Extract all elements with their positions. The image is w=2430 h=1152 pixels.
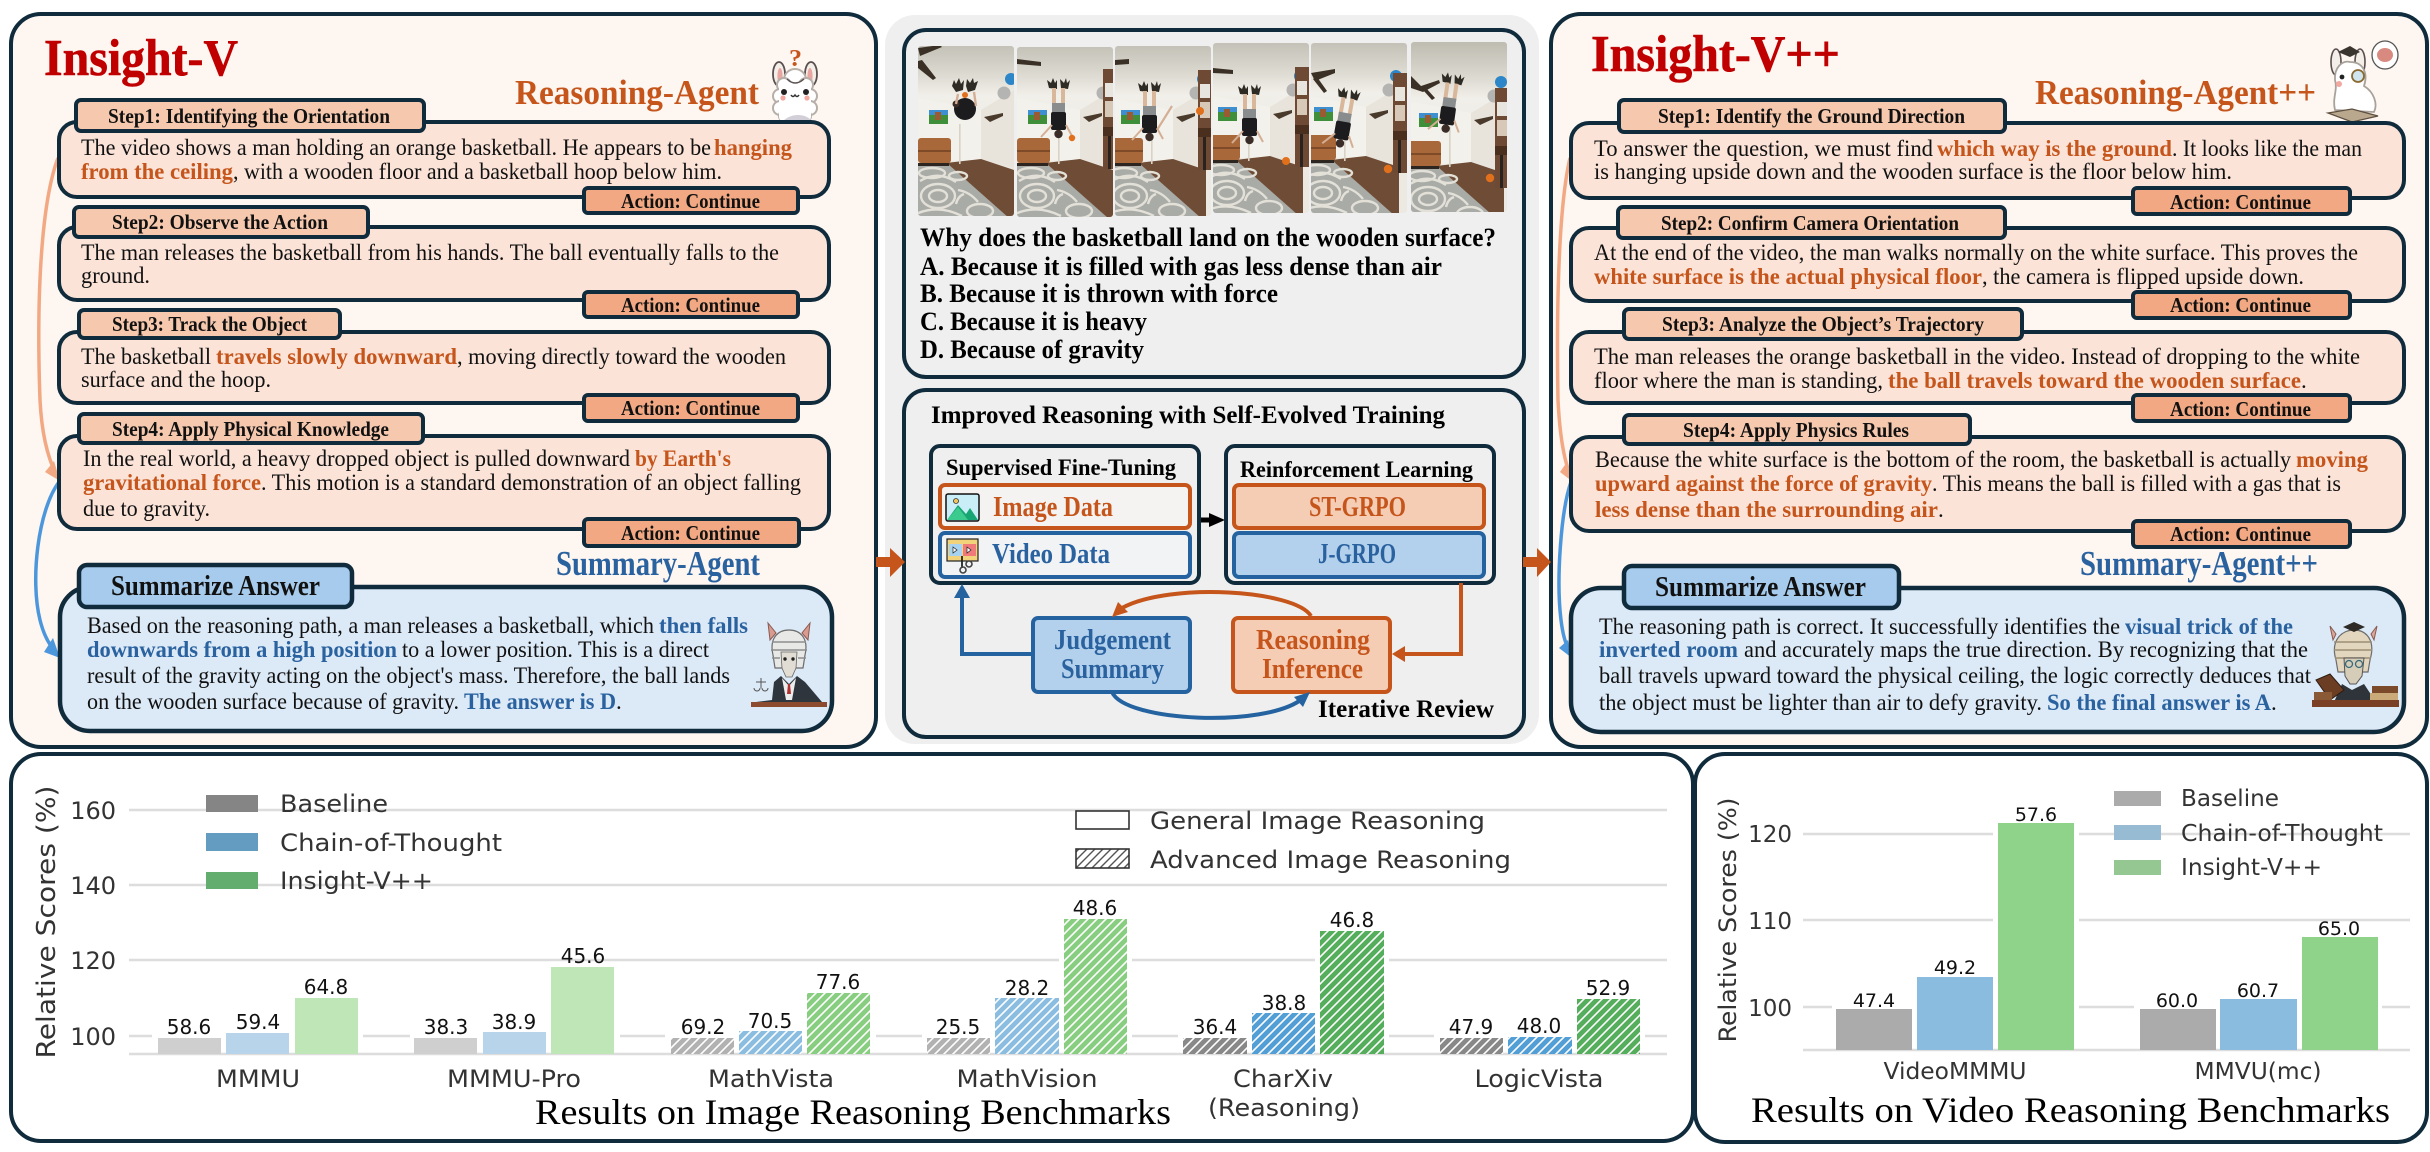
legend: methods: Insight-V++	[2181, 855, 2322, 881]
summary box: on the wooden surface because of gravity.	[87, 689, 459, 714]
bars: MathVision: 25.5	[936, 1015, 980, 1039]
label: iterative review: Iterative Review	[1318, 696, 1494, 723]
icon: judge alpaca	[751, 623, 827, 707]
arrow: left panel to center	[876, 548, 905, 577]
summary box: Based on the reasoning path, a man releases a basketball, which	[87, 613, 654, 638]
step 4: due to gravity.	[83, 496, 210, 521]
arrow: to reinforcement learning	[1201, 513, 1225, 527]
summary box: The reasoning path is correct. It successfully identifies the	[1599, 614, 2120, 639]
step 2: Step2: Confirm Camera Orientation	[1661, 211, 1959, 235]
box: reasoning inference: Reasoning	[1256, 625, 1370, 656]
step 3	[59, 310, 829, 421]
step 3: surface and the hoop.	[81, 367, 271, 392]
step 4: Step4: Apply Physical Knowledge	[112, 417, 389, 441]
arrow: reasoning flow	[1558, 158, 1573, 482]
bars: MathVision: 48.6	[1073, 896, 1117, 920]
step 2: white surface is the actual physical floor	[1594, 264, 1982, 289]
bars: MathVista: 77.6	[816, 970, 860, 994]
step 2: ground.	[81, 263, 150, 288]
panel: video reasoning benchmarks	[1695, 754, 2427, 1142]
panel: Insight-V++	[1523, 14, 2427, 747]
step 4: by Earth's	[635, 446, 731, 471]
bars: MathVista: MathVista	[708, 1065, 834, 1093]
heading: Reasoning-Agent++: Reasoning-Agent++	[2035, 73, 2316, 112]
step 4: upward against the force of gravity	[1595, 471, 1932, 496]
summary box: .	[2271, 690, 2277, 715]
step 3: , moving directly toward the wooden	[457, 344, 786, 369]
step 4: Action: Continue	[2170, 522, 2311, 546]
bars: MMMU: 64.8	[304, 975, 348, 999]
bars: CharXiv: 36.4	[1193, 1015, 1237, 1039]
heading: training: Improved Reasoning with Self-Evolved Training	[931, 402, 1445, 429]
step 4: . This motion is a standard demonstration of an object falling	[261, 470, 801, 495]
arrow: summary to inference	[1112, 692, 1310, 718]
bars: MMVU(mc): 60.7	[2237, 980, 2279, 1002]
box: judgement summary: Summary	[1061, 654, 1164, 685]
bars: MMMU-Pro: 45.6	[561, 944, 605, 968]
step 3	[1571, 309, 2404, 421]
question and options: D. Because of gravity	[920, 335, 1144, 364]
legend: methods: Chain-of-Thought	[280, 829, 502, 857]
summary box: Summarize Answer	[1655, 571, 1866, 603]
icon: thinking alpaca	[2328, 41, 2398, 122]
step 1: which way is the ground	[1937, 136, 2172, 161]
panel: supervised fine-tuning: Supervised Fine-Tuning	[946, 455, 1176, 480]
y axis: 100	[1748, 996, 1792, 1022]
summary box: Summarize Answer	[111, 570, 320, 602]
summary box: So the final answer is A	[2047, 690, 2271, 715]
panel: supervised fine-tuning: Image Data	[993, 492, 1113, 523]
box: judgement summary	[1033, 618, 1190, 692]
step 3: The man releases the orange basketball in the video. Instead of dropping to the white	[1594, 344, 2360, 369]
legend: methods	[206, 790, 502, 895]
bars: MathVista	[671, 970, 870, 1093]
summary box: The answer is D	[464, 689, 616, 714]
step 3: floor where the man is standing,	[1594, 368, 1883, 393]
y axis: 160	[70, 797, 116, 825]
y axis: Relative Scores (%)	[1714, 798, 1742, 1042]
bars: MMVU(mc): 65.0	[2318, 918, 2360, 940]
step 1: Step1: Identify the Ground Direction	[1658, 104, 1965, 128]
bars: LogicVista: LogicVista	[1474, 1065, 1604, 1093]
arrow: reinforcement to inference	[1392, 583, 1461, 662]
bars: CharXiv: 46.8	[1330, 908, 1374, 932]
panel: reinforcement learning: Reinforcement Learning	[1240, 457, 1473, 482]
panel: Insight-V	[11, 14, 876, 747]
bars: VideoMMMU: VideoMMMU	[1884, 1059, 2026, 1085]
step 1: . It looks like the man	[2172, 136, 2362, 161]
panel: self-evolved training	[904, 390, 1524, 737]
bars: MMMU-Pro: MMMU-Pro	[447, 1065, 581, 1093]
step 1: To answer the question, we must find	[1594, 136, 1933, 161]
bars: MMMU: 59.4	[236, 1010, 280, 1034]
step 3: .	[2301, 368, 2307, 393]
grid lines	[129, 810, 1667, 1054]
panel: reinforcement learning: ST-GRPO	[1309, 492, 1406, 523]
bars: VideoMMMU: 47.4	[1853, 990, 1895, 1012]
bars: MMMU-Pro: 38.3	[424, 1015, 468, 1039]
question and options	[920, 223, 1496, 364]
question and options: A. Because it is filled with gas less dense than air	[920, 252, 1442, 281]
step 2: The man releases the basketball from his hands. The ball eventually falls to the	[81, 240, 779, 265]
summary box: and accurately maps the true direction. By recognizing that the	[1744, 637, 2308, 662]
step 4	[1571, 415, 2404, 547]
step 4: Because the white surface is the bottom of the room, the basketball is actually	[1595, 447, 2291, 472]
bars: LogicVista: 52.9	[1586, 976, 1630, 1000]
bars: VideoMMMU: 57.6	[2015, 804, 2057, 826]
step 3: travels slowly downward	[216, 344, 457, 369]
step 3: Action: Continue	[621, 396, 760, 420]
panel: supervised fine-tuning	[931, 446, 1199, 583]
summary box: inverted room	[1599, 637, 1738, 662]
legend: methods	[2114, 786, 2383, 881]
step 3: Step3: Analyze the Object’s Trajectory	[1662, 312, 1984, 336]
bars: MMMU: MMMU	[216, 1065, 300, 1093]
summary box: downwards from a high position	[87, 637, 397, 662]
grid lines	[1803, 834, 2410, 1050]
bars: MMMU	[158, 975, 358, 1093]
arrow: reasoning flow	[39, 158, 60, 481]
step 1: from the ceiling	[81, 159, 233, 184]
legend: task types: Advanced Image Reasoning	[1150, 846, 1511, 874]
step 1: The video shows a man holding an orange basketball. He appears to be	[81, 135, 711, 160]
bars: MathVista: 69.2	[681, 1015, 725, 1039]
bars: LogicVista: 48.0	[1517, 1014, 1561, 1038]
step 3: the ball travels toward the wooden surface	[1888, 368, 2301, 393]
step 1: , with a wooden floor and a basketball hoop below him.	[233, 159, 722, 184]
step 4: Step4: Apply Physics Rules	[1683, 418, 1909, 442]
arrow: center to right panel	[1523, 548, 1551, 577]
summary box: .	[616, 689, 622, 714]
summary box: then falls	[659, 613, 748, 638]
video frame 6	[1411, 42, 1507, 212]
bars: MathVision: MathVision	[956, 1065, 1098, 1093]
bars: CharXiv: 38.8	[1262, 991, 1306, 1015]
legend: task types	[1076, 807, 1511, 874]
legend: methods: Chain-of-Thought	[2181, 821, 2383, 847]
box: reasoning inference: Inference	[1262, 654, 1363, 685]
step 2: Action: Continue	[2170, 293, 2311, 317]
bars: MMMU-Pro	[414, 944, 614, 1093]
y axis: 120	[70, 947, 116, 975]
y axis	[1714, 798, 1792, 1042]
y axis: Relative Scores (%)	[32, 786, 62, 1058]
legend: task types: General Image Reasoning	[1150, 807, 1485, 835]
y axis: 110	[1748, 909, 1792, 935]
summary box: result of the gravity acting on the object's mass. Therefore, the ball lands	[87, 663, 730, 688]
video frame 2	[1017, 47, 1113, 217]
bars: MathVista: 70.5	[748, 1009, 792, 1033]
question and options: B. Because it is thrown with force	[920, 279, 1278, 308]
arrow: summary flow	[36, 482, 60, 658]
step 1	[59, 100, 829, 213]
title: Insight-V: Insight-V	[44, 30, 238, 87]
step 4: gravitational force	[83, 470, 261, 495]
arrow: summary to supervised	[954, 584, 1033, 654]
summary box	[60, 565, 832, 731]
panel: reinforcement learning	[1226, 446, 1494, 583]
summary box: to a lower position. This is a direct	[402, 637, 710, 662]
bars: MathVision: 28.2	[1005, 976, 1049, 1000]
chart title: image: Results on Image Reasoning Benchmarks	[535, 1092, 1171, 1132]
step 4: Action: Continue	[621, 521, 760, 545]
step 3: Action: Continue	[2170, 397, 2311, 421]
step 2: Action: Continue	[621, 293, 760, 317]
y axis: 120	[1748, 822, 1792, 848]
icon: confused alpaca	[773, 46, 817, 122]
summary box: ball travels upward toward the physical ceiling, the logic correctly deduces that	[1599, 663, 2312, 688]
icon: scholar judge alpaca	[2312, 622, 2399, 707]
bars: VideoMMMU: 49.2	[1934, 957, 1976, 979]
title: Insight-V++: Insight-V++	[1591, 26, 1840, 83]
legend: methods: Insight-V++	[280, 867, 433, 895]
bars: MMVU(mc)	[2140, 918, 2378, 1085]
step 1	[1571, 100, 2404, 214]
step 4: .	[1938, 497, 1944, 522]
y axis: 100	[70, 1023, 116, 1051]
arrow: summary flow	[1559, 482, 1572, 658]
step 4	[59, 414, 829, 546]
bars: MathVision	[927, 896, 1127, 1093]
legend: methods: Baseline	[280, 790, 388, 818]
icon: confused alpaca: ?	[789, 46, 802, 72]
panel: image reasoning benchmarks	[11, 754, 1693, 1141]
bars: VideoMMMU	[1836, 804, 2074, 1085]
question and options: C. Because it is heavy	[920, 307, 1147, 336]
step 2: , the camera is flipped upside down.	[1982, 264, 2304, 289]
step 1: hanging	[714, 135, 792, 160]
bars: MMVU(mc): MMVU(mc)	[2194, 1059, 2322, 1085]
video frame 5	[1311, 43, 1407, 213]
bars: CharXiv	[1183, 908, 1384, 1122]
bars: CharXiv: (Reasoning)	[1208, 1094, 1360, 1122]
question and options: Why does the basketball land on the wooden surface?	[920, 223, 1496, 252]
summary box: the object must be lighter than air to defy gravity.	[1599, 690, 2042, 715]
panel: reinforcement learning: J-GRPO	[1318, 539, 1396, 570]
box: judgement summary: Judgement	[1054, 625, 1172, 656]
summary box: visual trick of the	[2125, 614, 2293, 639]
y axis	[32, 786, 116, 1058]
bars: LogicVista: 47.9	[1449, 1015, 1493, 1039]
video frame 1	[918, 46, 1014, 216]
step 4: moving	[2296, 447, 2368, 472]
video frame 3	[1115, 46, 1211, 216]
step 1: Action: Continue	[621, 189, 760, 213]
step 2: At the end of the video, the man walks normally on the white surface. This proves the	[1594, 240, 2358, 265]
step 1: Action: Continue	[2170, 190, 2311, 214]
step 4: less dense than the surrounding air	[1595, 497, 1938, 522]
icon: image	[946, 494, 979, 521]
video frame 4	[1213, 43, 1309, 213]
heading: Reasoning-Agent: Reasoning-Agent	[515, 73, 759, 112]
panel: center background	[885, 15, 1539, 744]
step 3: The basketball	[81, 344, 211, 369]
icon: video	[947, 539, 978, 573]
box: reasoning inference	[1233, 618, 1390, 692]
step 1: is hanging upside down and the wooden surface is the floor below him.	[1594, 159, 2232, 184]
bars: MMVU(mc): 60.0	[2156, 990, 2198, 1012]
chart title: video: Results on Video Reasoning Benchmarks	[1751, 1090, 2390, 1130]
step 1: Step1: Identifying the Orientation	[108, 104, 390, 128]
arrow: inference to summary	[1112, 592, 1311, 617]
heading: Summary-Agent: Summary-Agent	[556, 544, 760, 583]
step 4: . This means the ball is filled with a gas that is	[1932, 471, 2341, 496]
panel: supervised fine-tuning: Video Data	[992, 539, 1110, 570]
bars: MMMU-Pro: 38.9	[492, 1010, 536, 1034]
bars: CharXiv: CharXiv	[1233, 1065, 1333, 1093]
y axis: 140	[70, 872, 116, 900]
panel: video question	[904, 30, 1524, 377]
legend: methods: Baseline	[2181, 786, 2279, 812]
heading: Summary-Agent++: Summary-Agent++	[2080, 544, 2318, 583]
step 2: Step2: Observe the Action	[112, 210, 328, 234]
bars: LogicVista	[1440, 976, 1640, 1093]
step 2	[59, 207, 829, 317]
bars: MMMU: 58.6	[167, 1015, 211, 1039]
step 2	[1571, 207, 2404, 318]
step 4: In the real world, a heavy dropped object is pulled downward	[83, 446, 630, 471]
summary box	[1571, 566, 2404, 732]
step 3: Step3: Track the Object	[112, 312, 307, 336]
